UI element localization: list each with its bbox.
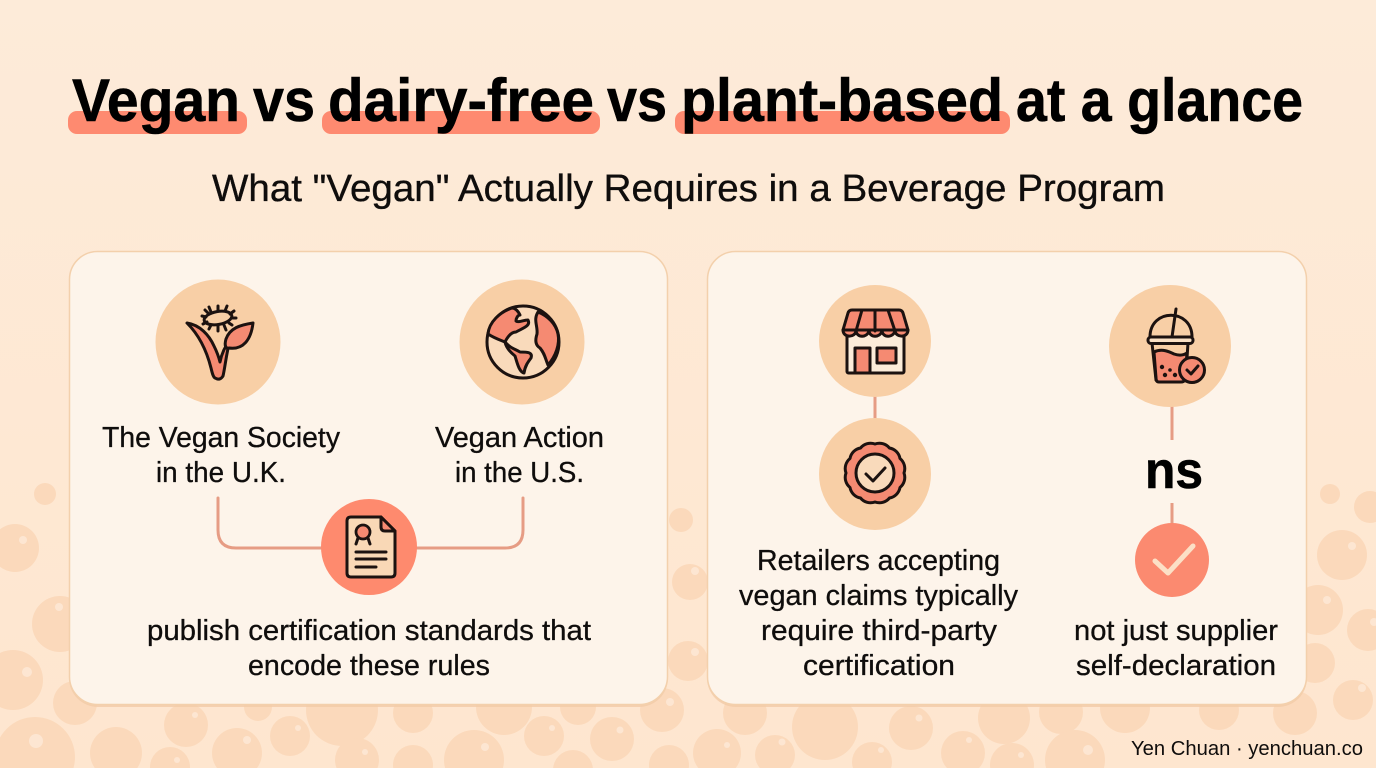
icon: plant with sun <box>156 280 280 404</box>
footer credit: Yen Chuan · yenchuan.co <box>1131 738 1363 760</box>
label: Vegan Action in the U.S.: Vegan Action <box>435 422 604 454</box>
title <box>68 67 1303 134</box>
panel: certification bodies <box>69 252 668 707</box>
title words: at a glance: at a glance <box>1016 67 1303 134</box>
text: publish certification standards <box>147 615 591 682</box>
background bubbles <box>0 483 1376 768</box>
icon: storefront <box>819 285 931 397</box>
text: retailers require certification: certification <box>803 650 955 682</box>
title highlight: Vegan <box>68 111 247 134</box>
label: The Vegan Society in the U.K.: The Vegan Society <box>102 422 340 454</box>
icon: certificate document <box>321 499 417 595</box>
panel: retailer requirements <box>707 252 1307 707</box>
text: retailers require certification: vegan claims typically <box>739 580 1018 612</box>
label: The Vegan Society in the U.K.: in the U.K. <box>156 457 286 489</box>
connector lines <box>218 498 523 548</box>
text: not just supplier self-declaration <box>1074 615 1278 682</box>
title word: Vegan: Vegan <box>72 67 240 134</box>
icon: bubble tea cup with check <box>1109 285 1231 407</box>
text: publish certification standards: encode these rules <box>248 650 490 682</box>
label: Vegan Action in the U.S. <box>435 422 604 489</box>
title highlight: plant-based <box>675 111 1010 134</box>
title word: vs: vs <box>253 67 315 134</box>
text: publish certification standards: publish certification standards that <box>147 615 591 647</box>
text: not just supplier self-declaration: self-declaration <box>1076 650 1276 682</box>
title word: dairy-free: dairy-free <box>328 67 594 134</box>
icon: globe <box>460 280 584 404</box>
text: not just supplier self-declaration: not just supplier <box>1074 615 1278 647</box>
label: Vegan Action in the U.S.: in the U.S. <box>455 457 584 489</box>
label: The Vegan Society in the U.K. <box>102 422 340 489</box>
icon: certification seal <box>819 418 931 530</box>
text: retailers require certification: require third-party <box>761 615 998 647</box>
text: retailers require certification: Retailers accepting <box>757 545 1000 577</box>
title word: plant-based: plant-based <box>681 67 1003 134</box>
text: retailers require certification <box>739 545 1018 682</box>
title highlight: dairy-free <box>322 111 600 134</box>
label: ns: ns <box>1145 442 1203 500</box>
connector lines <box>875 396 1172 524</box>
icon: check mark <box>1135 523 1209 597</box>
subtitle: What "Vegan" Actually Requires in a Beverage Program <box>212 168 1165 210</box>
title word: vs: vs <box>607 67 667 134</box>
